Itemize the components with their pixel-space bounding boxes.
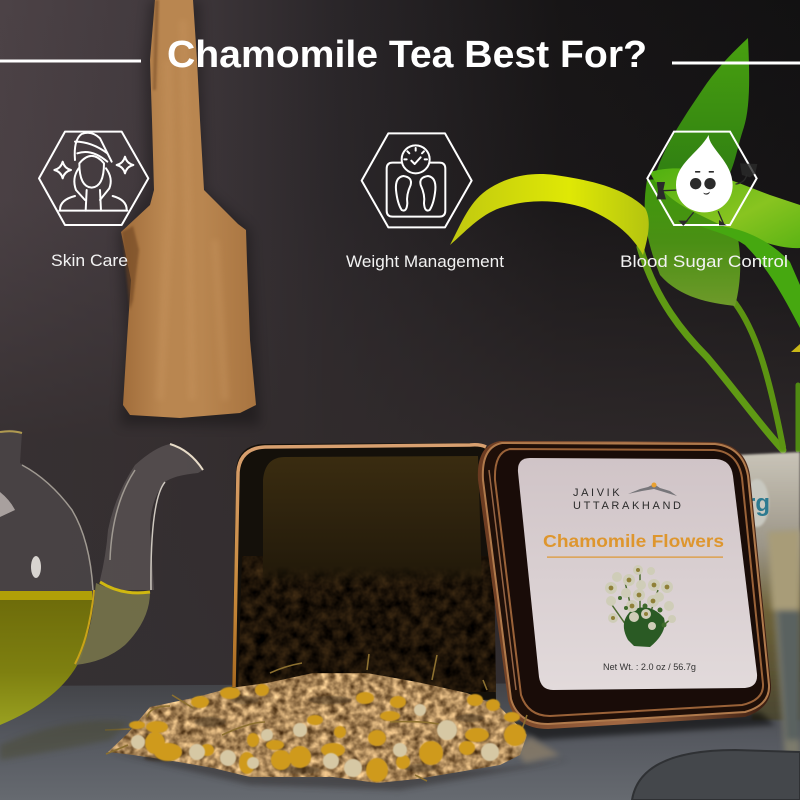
middle green leaf bbox=[645, 179, 740, 306]
flower pile texture bbox=[108, 673, 527, 783]
bright right leaf bbox=[650, 168, 800, 248]
label: skin care: Skin Care bbox=[51, 251, 128, 270]
closed tin with label, right bbox=[478, 441, 775, 740]
drop character limbs bbox=[663, 175, 747, 225]
tin body bbox=[478, 441, 771, 729]
dried flowers inside tin bbox=[238, 556, 496, 692]
plate, bottom right bbox=[632, 750, 800, 800]
white cup behind tin bbox=[738, 452, 800, 720]
stems bbox=[105, 654, 527, 781]
plant leaves and stems bbox=[450, 38, 800, 450]
yellow flower heads bbox=[129, 684, 526, 782]
upper green leaf bbox=[650, 38, 749, 200]
brand name: JAIVIK bbox=[573, 487, 622, 499]
tin inner back panel bbox=[263, 456, 482, 585]
tin inner rim bbox=[495, 449, 763, 716]
label: blood sugar control: Blood Sugar Control bbox=[620, 252, 788, 271]
icon: blood drop hexagon bbox=[647, 132, 757, 226]
tea in body bbox=[0, 592, 92, 725]
product name: Chamomile Flowers bbox=[543, 531, 724, 551]
glass outlines and highlights bbox=[0, 431, 203, 664]
wooden spatula hanging on wall bbox=[118, 0, 260, 425]
tin rim highlight bbox=[234, 445, 486, 687]
net weight: Net Wt. : 2.0 oz / 56.7g bbox=[603, 662, 696, 673]
label: weight management: Weight Management bbox=[346, 252, 504, 271]
title: Chamomile Tea Best For? bbox=[167, 34, 647, 76]
open tin, left bbox=[232, 443, 496, 700]
tin outer rim bbox=[483, 443, 769, 724]
foreground glass, blurred bbox=[768, 530, 800, 760]
tabletop bbox=[0, 682, 800, 800]
title rule, right bbox=[672, 62, 800, 64]
title rule, left bbox=[0, 60, 141, 62]
yellow leaf bbox=[450, 174, 649, 255]
tabletop reflection of teapot bbox=[0, 721, 130, 760]
brand name bbox=[573, 482, 681, 512]
icon: skin care hexagon bbox=[39, 132, 148, 225]
brand name: UTTARAKHAND bbox=[573, 500, 681, 512]
cup logo bbox=[745, 479, 770, 527]
teapot spout glass bbox=[100, 444, 203, 590]
teapot body glass bbox=[0, 430, 93, 600]
tea surface band bbox=[0, 591, 92, 600]
glass teapot with tea bbox=[0, 430, 203, 725]
shadows between flowers bbox=[144, 696, 484, 774]
lower right leaf bbox=[700, 225, 800, 328]
icon: weighing scale hexagon bbox=[362, 133, 472, 227]
yellow leaf tip at right edge bbox=[791, 344, 800, 352]
drop face bbox=[690, 171, 716, 195]
plant stems bbox=[640, 247, 798, 450]
drop body bbox=[676, 135, 733, 212]
loose petals bbox=[515, 737, 560, 763]
pale flower heads bbox=[131, 704, 499, 777]
pile of dried chamomile flowers bbox=[105, 654, 570, 790]
product label bbox=[518, 458, 757, 690]
chamomile plant illustration bbox=[605, 565, 676, 647]
tea in spout chamber bbox=[75, 583, 150, 665]
cup logo: rg bbox=[746, 490, 770, 517]
left highlight bbox=[489, 470, 516, 690]
product name underline bbox=[547, 556, 723, 558]
